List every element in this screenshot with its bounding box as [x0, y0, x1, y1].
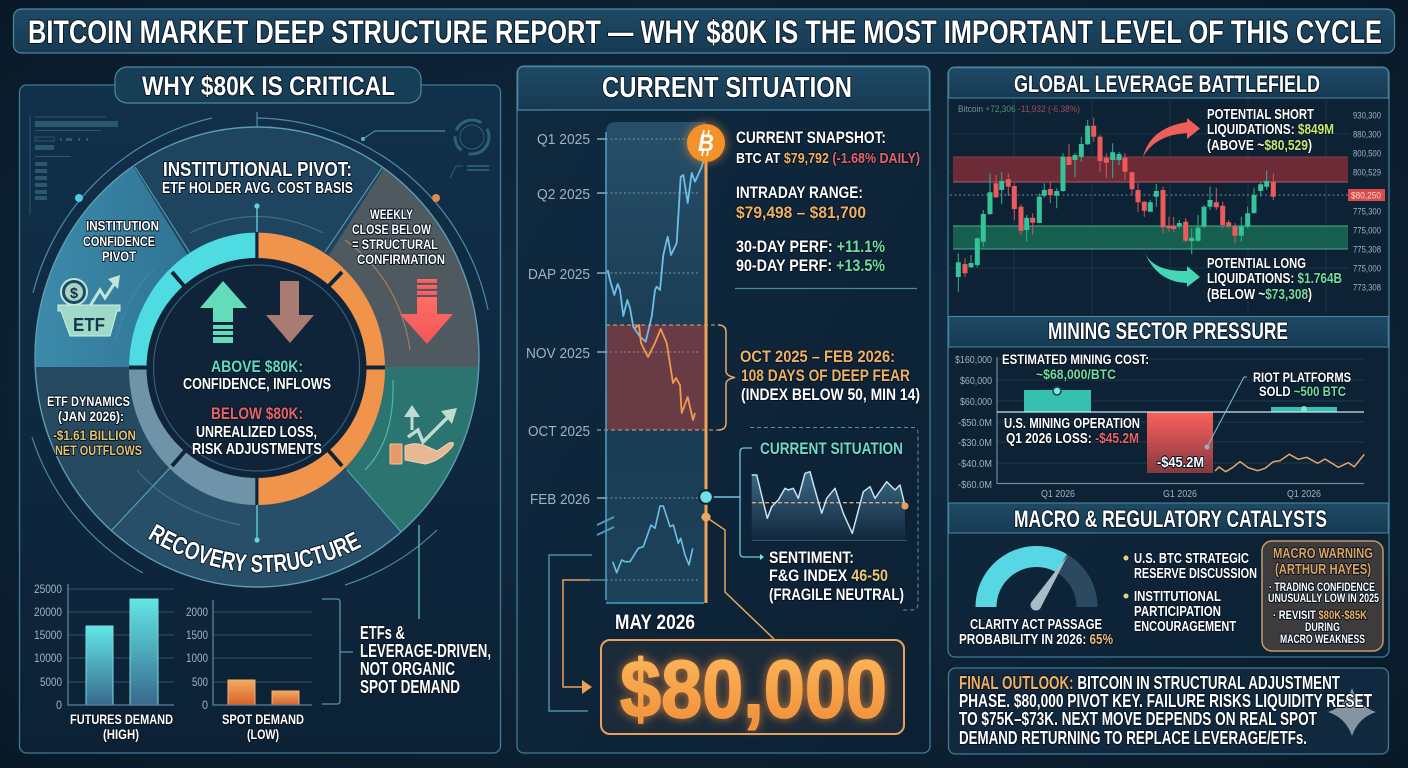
curly bracket: deep fear [718, 325, 735, 430]
price axis: 880,300 [1353, 130, 1381, 140]
current snapshot stats: 30-DAY PERF: +11.1% [736, 237, 885, 256]
center text: above and below $80k: UNREALIZED LOSS, [196, 424, 317, 441]
center text: above and below $80k: CONFIDENCE, INFLOWS [183, 376, 331, 393]
center text: above and below $80k: ABOVE $80K: [211, 357, 303, 376]
timeline price chart [597, 122, 720, 603]
price axis: 773,308 [1353, 282, 1381, 294]
current snapshot stats: $79,498 – $81,700 [736, 203, 866, 222]
segment label: etf dynamics: ETF DYNAMICS [47, 393, 130, 409]
segment label: weekly close below: CLOSE BELOW [352, 221, 432, 237]
callout: macro warning: · TRADING CONFIDENCE [1269, 582, 1375, 594]
current snapshot stats: INTRADAY RANGE: [736, 183, 863, 202]
price axis: 930,300 [1353, 110, 1381, 122]
mining bar chart: Q1 2026 [1041, 488, 1075, 500]
callout: etfs and leverage-driven: NOT ORGANIC [360, 659, 455, 679]
icon: bitcoin coin: B [698, 130, 714, 157]
label: riot platforms [1253, 369, 1351, 399]
segment label: weekly close below: CONFIRMATION [357, 251, 445, 267]
curved label: recovery structure: RECOVERY STRUCTURE [147, 522, 362, 574]
icon: hand with rising arrows [390, 405, 457, 464]
timeline date labels [526, 131, 590, 508]
segment label: etf dynamics: NET OUTFLOWS [55, 442, 142, 458]
label: estimated mining cost: ESTIMATED MINING COST: [1002, 351, 1149, 367]
label: estimated mining cost [1002, 351, 1149, 382]
callout: macro warning: MACRO WARNING [1273, 546, 1373, 562]
section: macro and regulatory catalysts [949, 503, 1388, 651]
chart: futures demand: 5000 [40, 675, 62, 689]
price axis [1353, 110, 1381, 294]
price axis: 800,529 [1353, 168, 1381, 178]
segment label: weekly close below: = STRUCTURAL [352, 236, 438, 252]
heading: mining sector pressure [949, 316, 1388, 347]
timeline date labels: Q2 2025 [537, 186, 590, 203]
timeline date labels: OCT 2025 [528, 423, 590, 440]
icon: etf basket [58, 275, 120, 336]
mining bar chart: G1 2026 [1163, 488, 1197, 500]
callout: $80,000 price box: $80,000 [620, 644, 887, 735]
panel: final outlook [948, 668, 1388, 754]
callout: macro warning: MACRO WEAKNESS [1280, 634, 1365, 646]
arrow: short liquidations [1143, 118, 1200, 157]
current snapshot stats: 90-DAY PERF: +13.5% [736, 256, 885, 275]
mining bar chart [955, 355, 1364, 500]
arrow: long liquidations [1143, 248, 1200, 287]
chart: spot demand: 1000 [186, 651, 208, 665]
chart: spot demand: 2000 [186, 605, 208, 619]
chart: futures demand: FUTURES DEMAND [70, 711, 173, 727]
chart: spot demand: (LOW) [247, 726, 279, 742]
icon: muted down arrow [266, 281, 314, 343]
outlook text [959, 673, 1372, 748]
mining bar chart: $60,000 [960, 376, 992, 387]
gauge: clarity act probability [959, 546, 1113, 648]
center text: above and below $80k [183, 357, 331, 458]
mining bar chart: $160,000 [955, 355, 992, 366]
bullet list: catalysts: ENCOURAGEMENT [1134, 619, 1236, 635]
icon: red down arrow [400, 279, 453, 344]
icon: green up arrow [200, 281, 247, 343]
bullet list: catalysts: PARTICIPATION [1134, 604, 1221, 620]
segment label: institution confidence pivot [83, 218, 159, 264]
callout: deep fear: 108 DAYS OF DEEP FEAR [741, 366, 910, 385]
sentiment inset: SENTIMENT: [769, 548, 854, 567]
timeline date labels: FEB 2026 [530, 491, 590, 508]
ring: pivot gauge [129, 232, 385, 505]
heading: current situation: CURRENT SITUATION [602, 72, 852, 104]
sentiment inset [712, 428, 918, 610]
callout: long liquidations: POTENTIAL LONG [1207, 255, 1306, 272]
bullet list: catalysts [1124, 551, 1257, 635]
callout: etfs and leverage-driven [360, 623, 491, 697]
top label: institutional pivot: INSTITUTIONAL PIVOT: [163, 159, 352, 181]
price axis: 775,308 [1353, 244, 1381, 256]
callout: deep fear: (INDEX BELOW 50, MIN 14) [741, 385, 920, 404]
chart: spot demand: 0 [202, 698, 208, 712]
top label: institutional pivot [162, 159, 353, 197]
section: mining sector pressure [949, 316, 1388, 503]
outer radial wheel [32, 112, 488, 588]
timeline date labels: Q1 2025 [537, 131, 590, 148]
timeline date labels: DAP 2025 [528, 266, 590, 283]
callout: short liquidations [1207, 106, 1334, 154]
center text: above and below $80k: BELOW $80K: [211, 404, 303, 423]
chart: futures demand: 10000 [34, 651, 62, 665]
sentiment inset: (FRAGILE NEUTRAL) [769, 585, 904, 604]
segment label: etf dynamics: (JAN 2026): [58, 408, 124, 424]
chart: futures demand: 15000 [34, 628, 62, 642]
callout: etfs and leverage-driven: SPOT DEMAND [360, 677, 460, 697]
callout: macro warning [1262, 541, 1383, 651]
sentiment inset: CURRENT SITUATION [760, 439, 903, 458]
chart: futures demand [34, 582, 174, 742]
panel: current situation [517, 66, 930, 753]
center text: above and below $80k: RISK ADJUSTMENTS [192, 441, 322, 458]
panel: why $80k is critical [18, 66, 502, 754]
bullet list: catalysts: U.S. BTC STRATEGIC [1134, 551, 1249, 567]
top label: institutional pivot: ETF HOLDER AVG. COST BASIS [162, 180, 353, 197]
panel: right column [948, 67, 1389, 657]
sentiment sparkline [752, 472, 909, 540]
callout: long liquidations: (BELOW ~$73,308) [1207, 286, 1312, 303]
bullet list: catalysts: INSTITUTIONAL [1134, 589, 1221, 605]
current snapshot stats: BTC AT $79,792 (-1.68% DAILY) [736, 150, 920, 167]
current snapshot stats: CURRENT SNAPSHOT: [736, 128, 886, 147]
chart: futures demand: 0 [56, 698, 62, 712]
chart: spot demand: 500 [192, 675, 208, 689]
segment label: weekly close below: WEEKLY [370, 206, 413, 222]
segment label: etf dynamics: -$1.61 BILLION [53, 427, 136, 443]
chart: futures demand: 20000 [34, 605, 62, 619]
timeline nodes [699, 490, 713, 522]
label: estimated mining cost: ~$68,000/BTC [1036, 366, 1116, 382]
price axis: 775,300 [1353, 206, 1381, 218]
segment label: etf dynamics [47, 393, 142, 458]
gauge: clarity act probability: PROBABILITY IN 2026: 65% [959, 632, 1113, 648]
price axis: 775,000 [1353, 264, 1381, 274]
callout: deep fear [740, 347, 920, 404]
heading: mining sector pressure: MINING SECTOR PRESSURE [1048, 318, 1288, 345]
segment label: institution confidence pivot: INSTITUTION [86, 218, 159, 234]
label: riot platforms: RIOT PLATFORMS [1253, 369, 1351, 385]
sentiment inset: F&G INDEX 46-50 [769, 566, 888, 585]
timeline connectors to price box [549, 517, 774, 711]
icon: etf basket: ETF [73, 315, 105, 335]
chart: spot demand [186, 600, 312, 742]
label: riot platforms: SOLD ~500 BTC [1259, 383, 1346, 399]
bullet list: catalysts: RESERVE DISCUSSION [1134, 566, 1257, 582]
current snapshot stats [736, 128, 920, 275]
label: may 2026: MAY 2026 [615, 611, 695, 634]
icon: etf basket: $ [70, 285, 79, 302]
label: u.s. mining operation loss: U.S. MINING OPERATION [1004, 416, 1140, 432]
chart: spot demand: SPOT DEMAND [222, 711, 304, 727]
label: u.s. mining operation loss [1004, 416, 1140, 447]
icon: bitcoin coin [687, 124, 725, 162]
gauge: clarity act probability: CLARITY ACT PASSAGE [970, 617, 1102, 633]
callout: short liquidations: (ABOVE ~$80,529) [1207, 137, 1312, 154]
callout: deep fear: OCT 2025 – FEB 2026: [740, 347, 895, 366]
callout: macro warning: UNUSUALLY LOW IN 2025 [1268, 593, 1379, 605]
callout: long liquidations: LIQUIDATIONS: $1.764B [1207, 270, 1342, 287]
callout: short liquidations: LIQUIDATIONS: $849M [1207, 121, 1334, 138]
callout: long liquidations [1207, 255, 1342, 303]
mining bar chart: $60,000 [960, 397, 992, 408]
price axis: 800,500 [1353, 148, 1381, 160]
timeline date labels: NOV 2025 [526, 345, 590, 362]
callout: macro warning: · REVISIT $80K-$85K [1273, 610, 1368, 622]
chart ticker: Bitcoin +72,306 -11,932 (-6.38%) [958, 104, 1080, 114]
price axis: 775,000 [1353, 226, 1381, 236]
callout: etfs and leverage-driven: LEVERAGE-DRIVEN, [360, 641, 491, 661]
mining bar chart: Q1 2026 [1287, 488, 1321, 500]
icon: sparkle star [1328, 688, 1376, 736]
bracket connector [322, 599, 353, 704]
segment label: institution confidence pivot: CONFIDENCE [83, 233, 155, 249]
candlestick chart [949, 99, 1388, 315]
callout: etfs and leverage-driven: ETFs & [360, 623, 405, 643]
segment label: weekly close below [352, 206, 445, 267]
callout: macro warning: DURING [1305, 622, 1340, 634]
mining bar chart: -$40.0M [958, 459, 992, 470]
heading: current situation [518, 67, 929, 110]
chart: futures demand: 25000 [34, 582, 62, 596]
mining bar chart: -$50.0M [958, 418, 992, 429]
callout: macro warning: (ARTHUR HAYES) [1275, 562, 1371, 578]
chart: futures demand: (HIGH) [103, 726, 139, 742]
callout: short liquidations: POTENTIAL SHORT [1207, 106, 1314, 123]
mining bar chart: -$60.0M [958, 480, 992, 491]
label: u.s. mining operation loss: Q1 2026 LOSS: -$45.2M [1006, 431, 1139, 447]
heading: why $80k is critical: WHY $80K IS CRITICAL [142, 71, 395, 101]
bar value label: -$45.2M [1157, 454, 1204, 471]
deep fear zone [606, 325, 706, 430]
mining bar chart: -$30.0M [958, 438, 992, 449]
segment label: institution confidence pivot: PIVOT [102, 248, 136, 264]
chart: spot demand: 1500 [186, 628, 208, 642]
current price tag: $80,250 [1351, 190, 1381, 202]
section: global leverage battlefield [949, 68, 1388, 315]
